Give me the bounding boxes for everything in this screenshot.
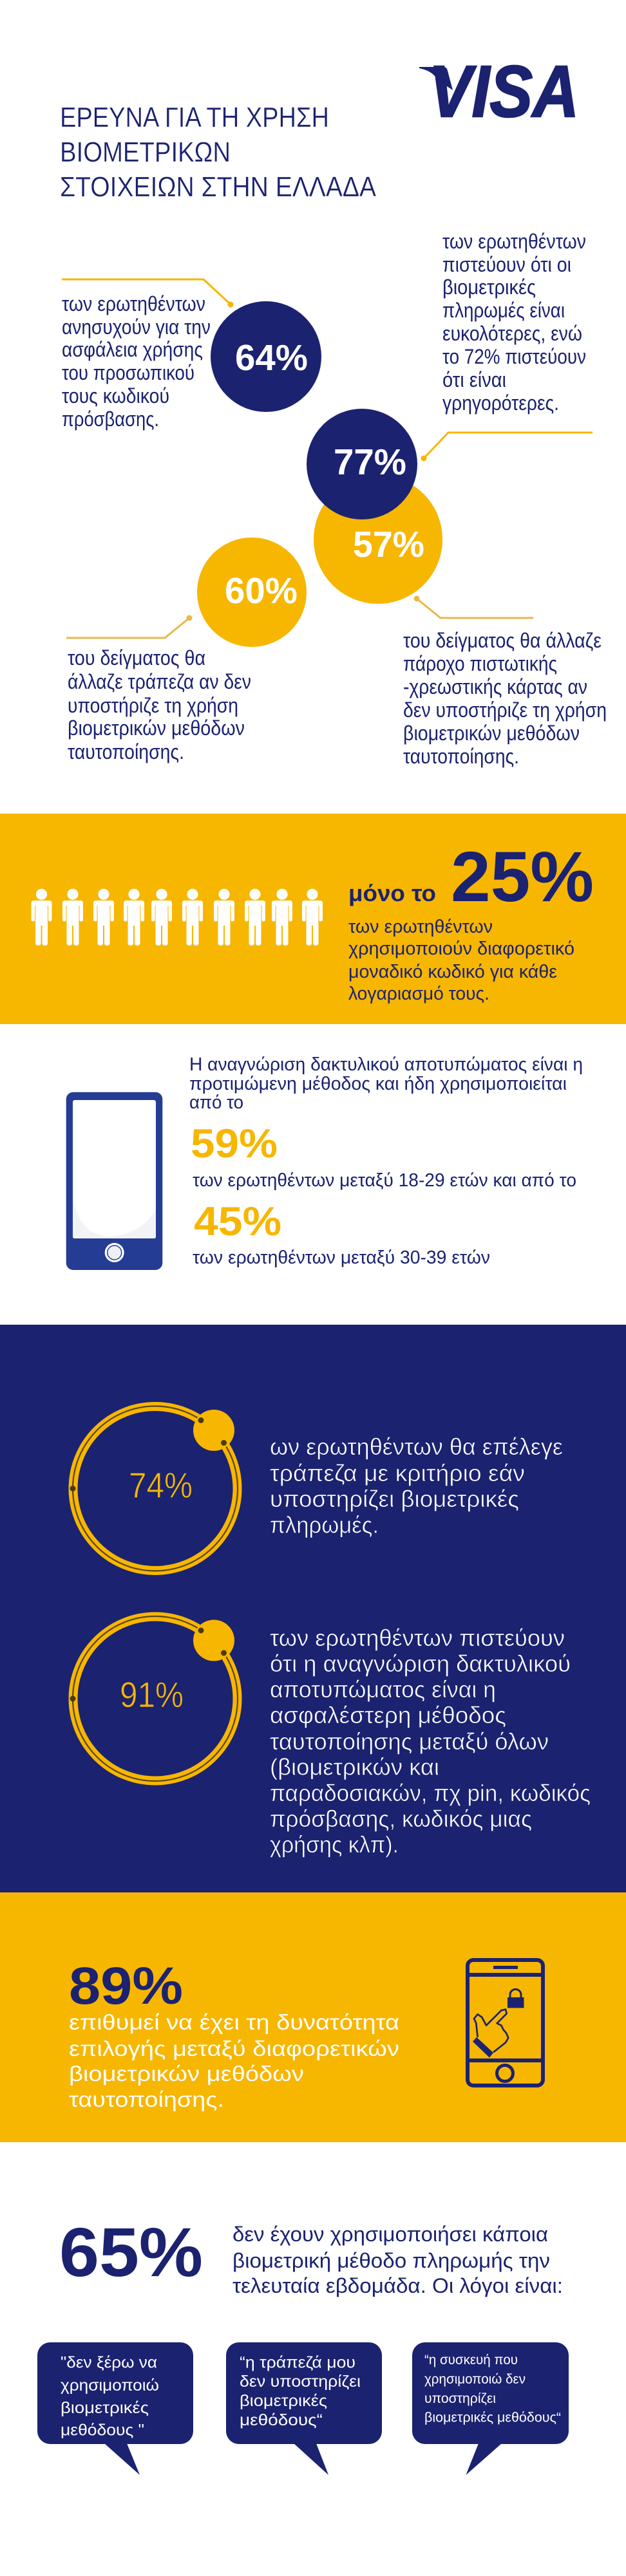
stat: 59%: 59% <box>191 1121 278 1166</box>
panel: navy statistics <box>0 1325 626 1892</box>
text: 91% description: αποτυπώματος είναι η <box>270 1676 496 1703</box>
circle: 64% <box>211 301 321 412</box>
speech bubble: do not know how: μεθόδους " <box>61 2422 144 2440</box>
speech bubble: device does not support: χρησιμοποιώ δεν <box>424 2372 526 2387</box>
circle: 57%: 57% <box>353 524 424 565</box>
text: 64% description: του προσωπικού <box>62 361 194 384</box>
text: 77% description: πιστεύουν ότι οι <box>442 253 571 276</box>
text: 65% description: βιομετρική μέθοδο πληρωμής την <box>232 2249 550 2272</box>
text: 64% description: τους κωδικού <box>62 384 169 407</box>
text: 89% description: ταυτοποίησης. <box>69 2087 224 2111</box>
text: 25% description <box>348 917 574 1004</box>
text: 25% description: χρησιμοποιούν διαφορετικό <box>348 938 574 959</box>
text: 74% description: πληρωμές. <box>270 1511 379 1538</box>
text: 77% description: βιομετρικές <box>442 275 536 299</box>
circle: 77% <box>307 409 417 519</box>
speech bubble: device does not support: υποστηρίζει <box>424 2391 496 2406</box>
text: 65% description: δεν έχουν χρησιμοποιήσει κάποια <box>232 2223 548 2246</box>
text: 64% description <box>62 292 211 431</box>
text: 91% description: παραδοσιακών, πχ pin, κωδικός <box>270 1780 591 1806</box>
text: 57% description: ταυτοποίησης. <box>403 745 519 768</box>
text: 91% description: (βιομετρικών και <box>270 1753 439 1780</box>
text: 65% description <box>232 2223 563 2297</box>
text: 64% description: των ερωτηθέντων <box>62 292 205 315</box>
text: 60% description <box>68 646 251 763</box>
text: 77% description: των ερωτηθέντων <box>442 230 586 253</box>
text: 60% description: βιομετρικών μεθόδων <box>68 716 245 740</box>
speech bubble: device does not support <box>412 2342 569 2475</box>
chart: ring 74% <box>70 1406 238 1571</box>
text: 57% description: δεν υποστήριζε τη χρήση <box>403 698 607 722</box>
text: 60% description: ταυτοποίησης. <box>68 740 184 763</box>
speech bubble: do not know how: χρησιμοποιώ <box>61 2376 159 2394</box>
icon: smartphone <box>66 1092 162 1270</box>
text: 89% description: βιομετρικών μεθόδων <box>69 2062 304 2086</box>
text: 77% description: πληρωμές είναι <box>442 299 565 322</box>
text: 89% description: επιλογής μεταξύ διαφορετικών <box>69 2037 399 2060</box>
text: 77% description: ότι είναι <box>442 368 506 391</box>
callout line: 57% <box>413 596 533 618</box>
text: fingerprint intro: από το <box>189 1092 243 1113</box>
callout line: 77% <box>421 433 593 461</box>
text: 77% description: το 72% πιστεύουν <box>442 345 586 368</box>
circle: 64%: 64% <box>235 337 308 378</box>
panel: 89% choice of methods <box>0 1892 626 2142</box>
text: 64% description: ανησυχούν για την <box>62 315 211 339</box>
text: 57% description: πάροχο πιστωτικής <box>403 652 557 675</box>
text: 65% description: τελευταία εβδομάδα. Οι λόγοι είναι: <box>232 2274 563 2297</box>
panel: fingerprint preference <box>66 1054 583 1270</box>
speech bubble: device does not support: “η συσκευή που <box>424 2353 518 2367</box>
text: fingerprint intro: Η αναγνώριση δακτυλικού αποτυπώματος είναι η <box>189 1054 583 1075</box>
callout line: 60% <box>66 615 192 638</box>
text: 57% description: -χρεωστικής κάρτας αν <box>403 675 587 698</box>
heading: only 25%: 25% <box>451 837 594 917</box>
text: 77% description <box>442 230 586 415</box>
text: 74% description: υποστηρίζει βιομετρικές <box>270 1486 519 1512</box>
speech bubble: bank does not support: “η τράπεζά μου <box>240 2353 356 2371</box>
text: 25% description: μοναδικό κωδικό για κάθε <box>348 962 557 982</box>
speech bubble: bank does not support: δεν υποστηρίζει <box>240 2373 361 2391</box>
text: 64% description: πρόσβασης. <box>62 407 159 431</box>
text: 74% description <box>270 1433 563 1538</box>
chart: ring 91% <box>70 1616 238 1781</box>
stat: 89%: 89% <box>69 1957 183 2015</box>
speech bubble: bank does not support <box>226 2342 382 2475</box>
text: 74% description: ων ερωτηθέντων θα επέλεγε <box>270 1433 563 1460</box>
speech bubble: bank does not support: βιομετρικές <box>240 2392 327 2410</box>
text: fingerprint intro <box>189 1054 583 1113</box>
logo: VISA: VISA <box>429 51 579 132</box>
text: fingerprint intro: προτιμώμενη μέθοδος και ήδη χρησιμοποιείται <box>189 1074 567 1094</box>
text: 91% description: ασφαλέστερη μέθοδος <box>270 1702 506 1728</box>
text: 77% description: γρηγορότερες. <box>442 391 559 415</box>
circle: 57% <box>314 475 442 604</box>
stat: 45%: 45% <box>194 1199 281 1244</box>
stat: 59% <box>191 1121 576 1191</box>
speech bubble: do not know how <box>37 2342 193 2475</box>
panel: key statistics circles <box>62 230 607 768</box>
speech bubble: do not know how: βιομετρικές <box>61 2399 149 2417</box>
panel: 65% no biometric payment <box>37 2213 569 2475</box>
text: 91% description: των ερωτηθέντων πιστεύουν <box>270 1625 565 1651</box>
title: ΒΙΟΜΕΤΡΙΚΩΝ <box>60 137 231 168</box>
chart: ring 74%: 74% <box>129 1465 193 1505</box>
stat: 65%: 65% <box>59 2213 203 2291</box>
text: 25% description: λογαριασμό τους. <box>348 984 489 1004</box>
circle: 60%: 60% <box>225 570 298 611</box>
icon: row of ten people <box>31 889 323 946</box>
text: 25% description: των ερωτηθέντων <box>348 917 493 937</box>
text: 60% description: του δείγματος θα <box>68 646 205 669</box>
text: 91% description: ταυτοποίησης μεταξύ όλων <box>270 1728 549 1755</box>
text: 74% description: τράπεζα με κριτήριο εάν <box>270 1460 525 1486</box>
heading: only 25% <box>348 837 594 917</box>
speech bubble: do not know how: "δεν ξέρω να <box>61 2353 157 2371</box>
text: 57% description: βιομετρικών μεθόδων <box>403 722 580 745</box>
text: 77% description: ευκολότερες, ενώ <box>442 322 582 345</box>
text: 57% description: του δείγματος θα άλλαζε <box>403 629 602 652</box>
text: 91% description: ότι η αναγνώριση δακτυλικού <box>270 1650 571 1677</box>
panel: 25% unique passwords <box>0 814 626 1024</box>
title: ΣΤΟΙΧΕΙΩΝ ΣΤΗΝ ΕΛΛΑΔΑ <box>60 172 376 203</box>
text: 89% description: επιθυμεί να έχει τη δυνατότητα <box>69 2010 399 2034</box>
text: 89% description <box>69 2010 399 2111</box>
title: ΕΡΕΥΝΑ ΓΙΑ ΤΗ ΧΡΗΣΗ <box>60 102 329 133</box>
title <box>60 102 376 203</box>
heading: only 25%: μόνο το <box>348 880 436 906</box>
text: 91% description: χρήσης κλπ). <box>270 1831 399 1858</box>
icon: phone with hand and lock <box>468 1960 543 2086</box>
stat: 59%: των ερωτηθέντων μεταξύ 18-29 ετών και από το <box>193 1170 576 1191</box>
circle: 77%: 77% <box>334 442 406 483</box>
text: 64% description: ασφάλεια χρήσης <box>62 338 203 361</box>
text: 91% description <box>270 1625 591 1858</box>
speech bubble: bank does not support: μεθόδους“ <box>240 2411 323 2429</box>
speech bubble: device does not support: βιομετρικές μεθόδους“ <box>424 2410 561 2425</box>
text: 60% description: άλλαζε τράπεζα αν δεν <box>68 670 251 693</box>
callout line: 64% <box>62 279 233 308</box>
circle: 60% <box>197 537 307 647</box>
text: 60% description: υποστήριζε τη χρήση <box>68 694 238 717</box>
text: 57% description <box>403 629 607 768</box>
stat: 45%: των ερωτηθέντων μεταξύ 30-39 ετών <box>193 1247 490 1268</box>
chart: ring 91%: 91% <box>120 1674 184 1715</box>
text: 91% description: πρόσβασης, κωδικός μιας <box>270 1806 532 1832</box>
stat: 45% <box>193 1199 490 1268</box>
